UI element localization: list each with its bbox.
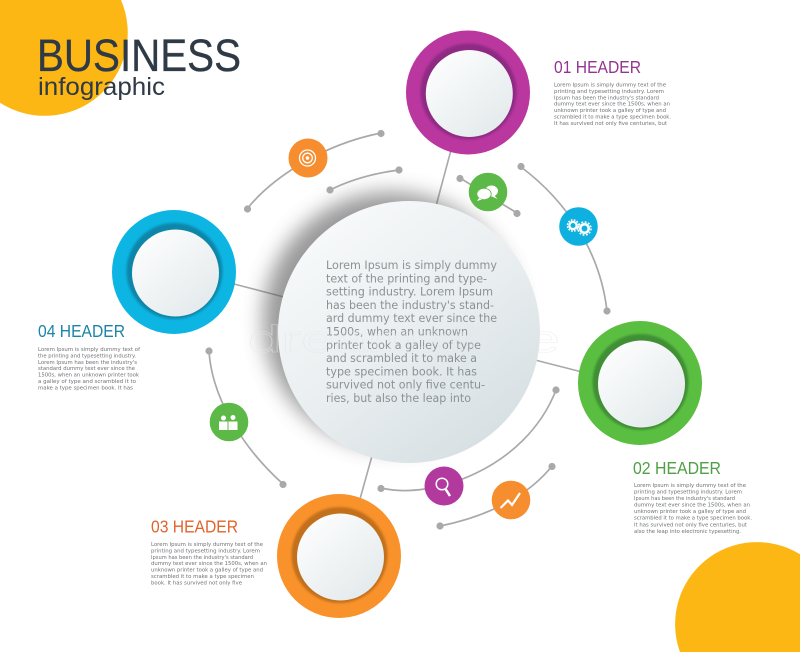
- icon: magnifier: [436, 478, 450, 496]
- text block 02: scrambled it to make a type specimen book.: [634, 516, 752, 522]
- text block 02: [633, 458, 752, 535]
- disc body text: ard dummy text ever since the: [326, 311, 497, 325]
- title: infographic: [38, 73, 165, 101]
- text block 04: Lorem Ipsum is simply dummy text of: [38, 347, 140, 353]
- text block 04: [38, 321, 140, 391]
- text block 01: 01 HEADER: [554, 57, 641, 77]
- text block 03: [151, 516, 267, 586]
- text block 04: make a type specimen book. It has: [38, 385, 133, 391]
- text block 03: book. It has survived not only five: [151, 580, 242, 586]
- title: BUSINESS: [37, 30, 241, 81]
- text block 02: 02 HEADER: [633, 458, 721, 478]
- text block 04: 1500s, when an unknown printer took: [38, 373, 139, 379]
- text block 01: printing and typesetting industry. Lorem: [554, 89, 664, 95]
- disc body text: text of the printing and type-: [326, 271, 487, 285]
- text block 04: Lorem Ipsum has been the industry's: [38, 360, 137, 366]
- text block 04: a galley of type and scrambled it to: [38, 379, 136, 385]
- short arc above disc: [326, 166, 403, 194]
- connector lines from centre to header circles: [234, 150, 582, 499]
- text block 02: also the leap into electronic typesetting.: [634, 529, 741, 535]
- text block 01: unknown printer took a galley of type and: [554, 108, 666, 114]
- text block 01: Ipsum has been the industry's standard: [554, 95, 659, 101]
- text block 04: the printing and typesetting industry.: [38, 353, 136, 359]
- arc with people icon: [205, 347, 287, 488]
- text block 02: Ipsum has been the industry's standard: [634, 496, 735, 502]
- title: [37, 30, 241, 101]
- header circle 02: [578, 321, 702, 445]
- text block 02: Lorem Ipsum is simply dummy text of the: [634, 483, 746, 489]
- decorative corner circle: top left: [0, 0, 128, 116]
- text block 02: It has survived not only five centuries, but: [634, 522, 747, 528]
- text block 03: printing and typesetting industry. Lorem: [151, 548, 260, 554]
- disc shadow: [263, 192, 519, 448]
- arc with gears icon: [517, 163, 611, 315]
- disc: [278, 201, 540, 463]
- watermark: dreamstime: [248, 319, 560, 361]
- decorative corner circle: bottom right: [675, 542, 800, 652]
- arc with target icon: [244, 130, 385, 213]
- text block 02: dummy text ever since the 1500s, when an: [634, 503, 750, 509]
- disc body text: and scrambled it to make a: [326, 351, 477, 365]
- text block 04: standard dummy text ever since the: [38, 366, 135, 372]
- text block 02: unknown printer took a galley of type and: [634, 509, 746, 515]
- icon: target: [300, 150, 316, 166]
- disc body text: type specimen book. It has: [326, 364, 477, 378]
- text block 04: 04 HEADER: [38, 321, 125, 341]
- disc body text: printer took a galley of type: [326, 338, 481, 352]
- disc body text: has been the industry's stand-: [326, 298, 494, 312]
- disc body text: Lorem Ipsum is simply dummy: [326, 258, 497, 272]
- arc with chart icon: [436, 463, 556, 530]
- text block 01: scrambled it to make a type specimen book.: [554, 114, 671, 120]
- icon: gears: [567, 220, 591, 235]
- icon: people: [219, 415, 238, 430]
- text block 03: scrambled it to make a type specimen: [151, 574, 254, 580]
- text block 03: dummy text ever since the 1500s, when an: [151, 561, 267, 567]
- header circle 04: [112, 210, 236, 334]
- text block 03: Lorem Ipsum is simply dummy text of the: [151, 542, 263, 548]
- text block 02: printing and typesetting industry. Lorem: [634, 490, 742, 496]
- disc body text: [326, 258, 497, 405]
- disc body text: setting industry. Lorem Ipsum: [326, 285, 493, 299]
- disc body text: ries, but also the leap into: [326, 391, 471, 405]
- icon: speech bubbles: [477, 186, 498, 201]
- text block 03: Ipsum has been the industry's standard: [151, 555, 253, 561]
- disc body text: 1500s, when an unknown: [326, 324, 468, 338]
- text block 01: dummy text ever since the 1500s, when an: [554, 102, 670, 108]
- line with chat icon: [456, 173, 521, 217]
- text block 01: Lorem Ipsum is simply dummy text of the: [554, 82, 666, 88]
- disc body text: survived not only five centu-: [326, 378, 485, 392]
- central disc with text: [263, 192, 540, 463]
- arc with magnifier icon: [377, 386, 560, 506]
- text block 03: unknown printer took a galley of type and: [151, 568, 263, 574]
- text block 01: [554, 57, 671, 127]
- text block 03: 03 HEADER: [151, 516, 238, 536]
- header circle 01: [406, 30, 530, 154]
- icon: trend line: [500, 493, 520, 508]
- header circle 03: [277, 494, 401, 618]
- text block 01: It has survived not only five centuries, but: [554, 121, 667, 127]
